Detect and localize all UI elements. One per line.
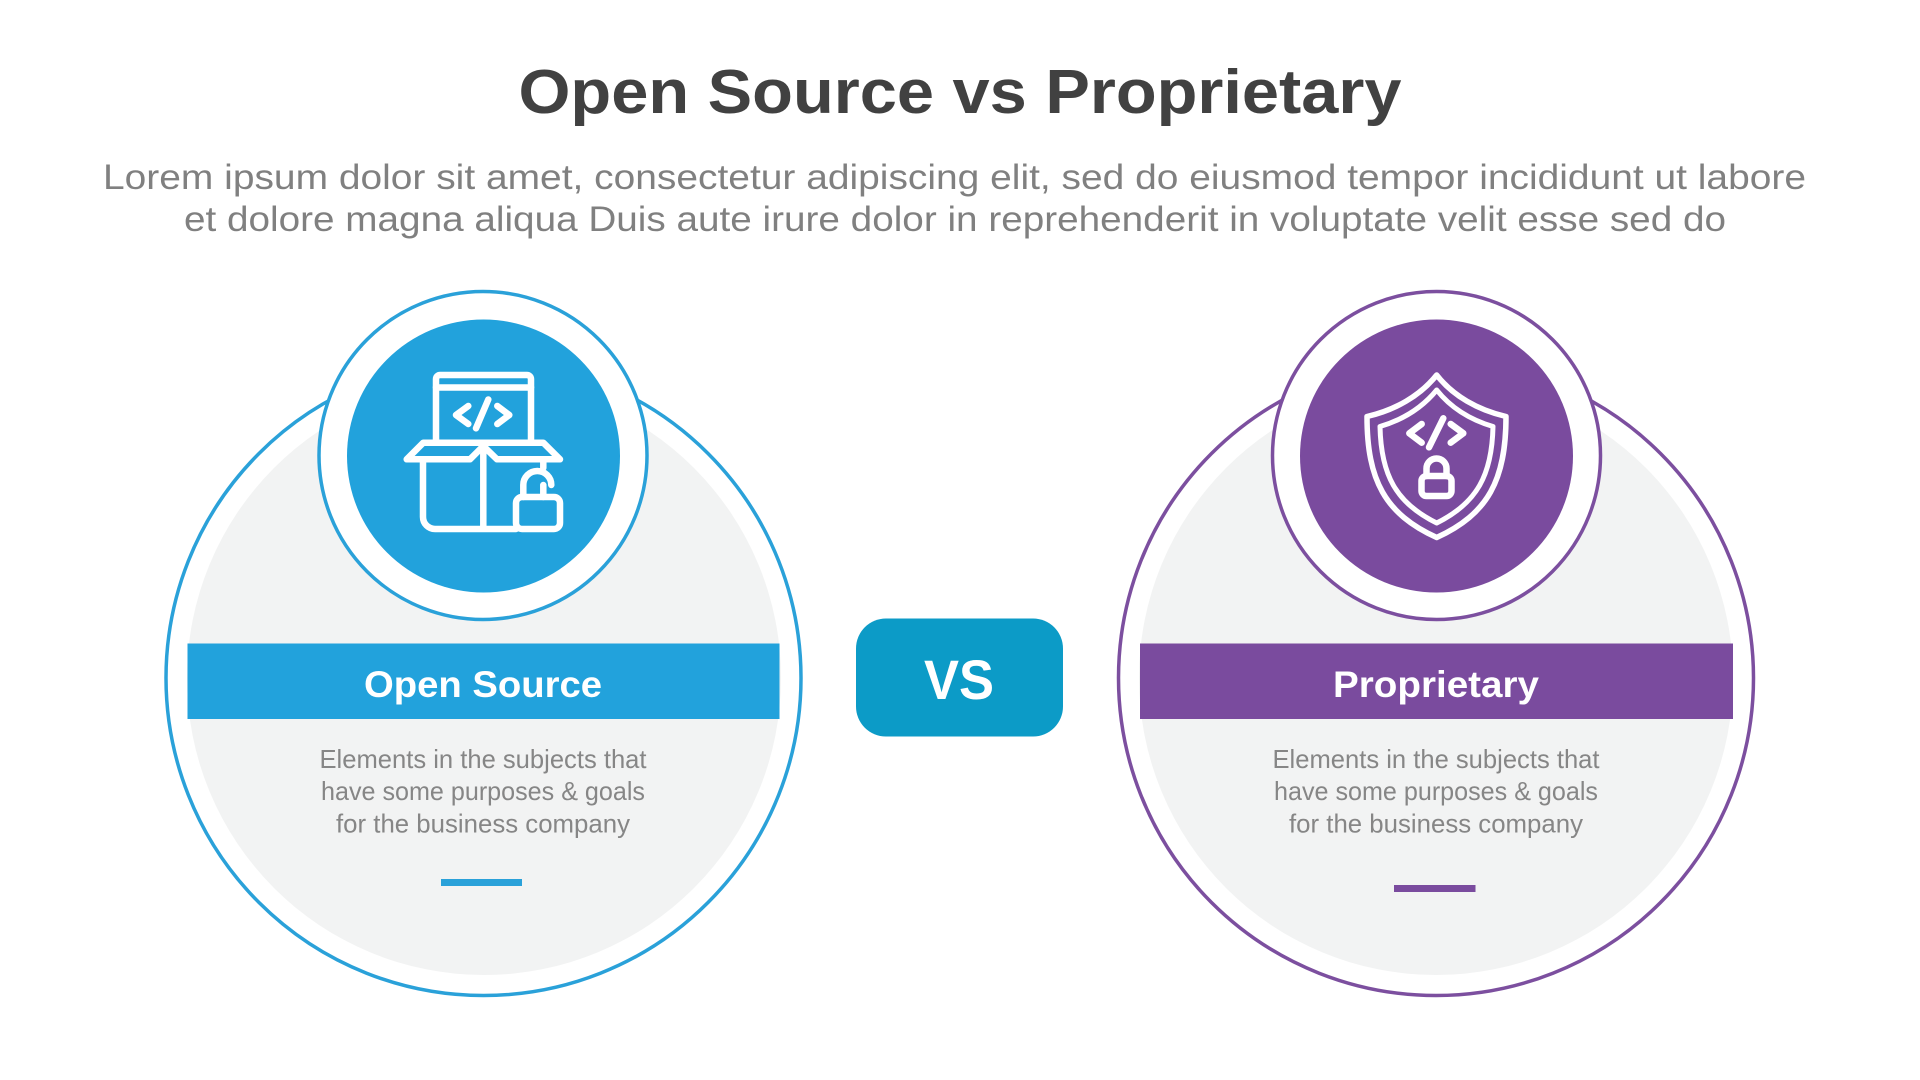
band label: Proprietary [1333, 664, 1539, 705]
icon ring [1272, 292, 1600, 620]
vs badge: VS [924, 648, 994, 711]
grey inner circle [187, 381, 781, 975]
grey inner circle [1139, 381, 1733, 975]
description text: for the business company [1289, 808, 1583, 838]
description text [320, 744, 647, 838]
panel: open source [166, 292, 801, 996]
description text: for the business company [336, 808, 630, 838]
description text: have some purposes & goals [1274, 776, 1598, 806]
icon: open box with code window and open padlock [407, 375, 560, 529]
outer circle outline [166, 360, 801, 996]
description text: Elements in the subjects that [320, 744, 647, 774]
outer circle outline [1118, 360, 1754, 996]
accent dash [1394, 885, 1476, 892]
band label: Open Source [364, 664, 602, 705]
title: Open Source vs Proprietary [518, 58, 1402, 127]
icon disc [1300, 320, 1573, 592]
subtitle text block: Lorem ipsum dolor sit amet, consectetur adipiscing elit, sed do eiusmod tempor incididunt ut labore [103, 158, 1806, 197]
icon disc [347, 320, 620, 592]
subtitle text block [103, 158, 1806, 239]
accent dash [441, 879, 522, 886]
description text [1272, 744, 1600, 838]
icon: shield with code and padlock [1367, 375, 1506, 538]
vs badge [856, 618, 1063, 736]
icon ring [319, 292, 647, 620]
header band [1140, 644, 1733, 719]
subtitle text block: et dolore magna aliqua Duis aute irure dolor in reprehenderit in voluptate velit esse sed do [184, 200, 1726, 239]
description text: have some purposes & goals [321, 776, 645, 806]
description text: Elements in the subjects that [1272, 744, 1600, 774]
panel: proprietary [1118, 292, 1754, 996]
header band [188, 644, 780, 719]
